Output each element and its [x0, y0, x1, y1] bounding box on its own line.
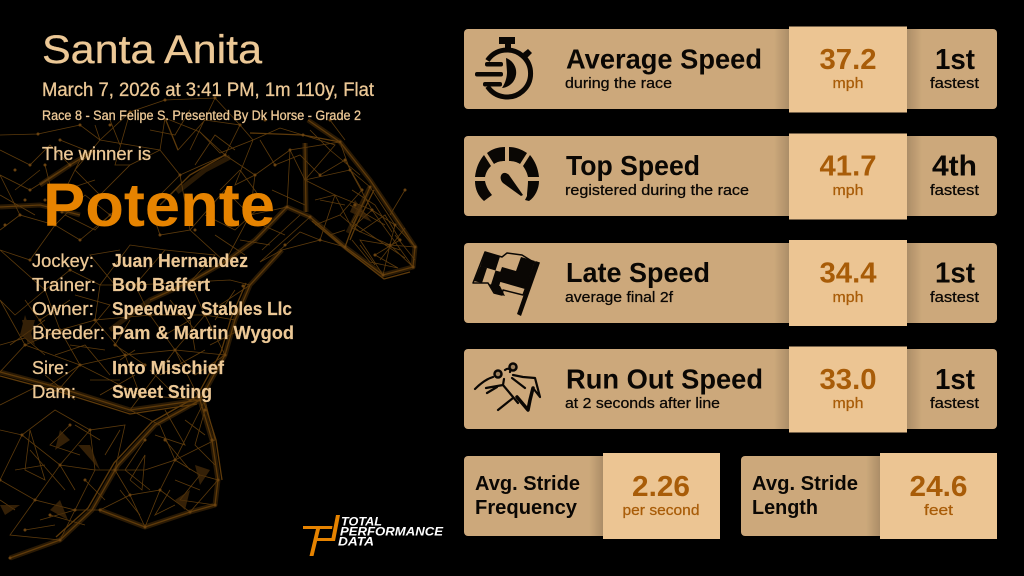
label: stride length: Avg. Stride [752, 472, 858, 495]
winner intro: The winner is [42, 144, 151, 164]
rank label: fastest [930, 396, 979, 412]
label: stride length: Length [752, 496, 818, 519]
value: 41.7 [820, 150, 876, 182]
connections details: Into Mischief [112, 357, 225, 378]
rank label: fastest [930, 290, 979, 306]
winner name: Potente [43, 171, 275, 239]
logo: total performance data: TOTAL [341, 514, 382, 528]
title: venue: Santa Anita [42, 28, 263, 72]
race name: Race 8 - San Felipe S. Presented By Dk Horse - Grade 2 [42, 108, 361, 123]
icon: checkered flag [473, 252, 540, 316]
rank: 4th [932, 150, 977, 182]
connections details: Jockey: [32, 250, 94, 271]
label: stride frequency: Frequency [475, 496, 578, 519]
unit: mph [832, 396, 864, 412]
connections details [32, 250, 294, 402]
connections details: Dam: [32, 381, 76, 402]
connections details: Trainer: [32, 274, 96, 295]
connections details: Sire: [32, 357, 69, 378]
logo: total performance data: PERFORMANCE [340, 524, 444, 538]
label: run out speed: Run Out Speed [566, 364, 763, 394]
panel: run out speed [464, 346, 997, 432]
panel: average stride length [741, 453, 997, 539]
unit: mph [832, 183, 864, 199]
value: 37.2 [820, 44, 876, 76]
connections details: Bob Baffert [112, 274, 210, 295]
panel: average stride frequency [464, 453, 720, 539]
unit: per second [622, 503, 700, 519]
rank: 1st [935, 258, 975, 290]
unit: feet [924, 503, 953, 519]
sublabel: average final 2f [565, 290, 674, 306]
icon: speedometer [475, 147, 539, 201]
panel: late speed [464, 240, 997, 326]
connections details: Pam & Martin Wygod [112, 322, 294, 343]
sublabel: at 2 seconds after line [565, 396, 720, 412]
panel: top speed [464, 134, 997, 220]
connections details: Sweet Sting [112, 381, 212, 402]
value: 34.4 [820, 258, 877, 290]
label: late speed: Late Speed [566, 257, 710, 288]
rank label: fastest [930, 76, 979, 92]
panel: average speed [464, 26, 997, 112]
sublabel: during the race [565, 76, 672, 92]
connections details: Owner: [32, 298, 94, 319]
value: 24.6 [910, 471, 968, 503]
label: average speed: Average Speed [566, 44, 762, 74]
value: 33.0 [820, 364, 876, 396]
rank: 1st [935, 364, 975, 396]
rank: 1st [935, 44, 975, 76]
connections details: Breeder: [32, 322, 105, 343]
connections details: Speedway Stables Llc [112, 298, 292, 319]
value: 2.26 [632, 471, 690, 503]
sublabel: registered during the race [565, 183, 749, 199]
label: stride frequency: Avg. Stride [475, 472, 580, 495]
label: top speed: Top Speed [566, 150, 700, 181]
icon: racing horses and jockeys [475, 364, 540, 410]
logo: total performance data [303, 514, 444, 556]
unit: mph [832, 76, 864, 92]
connections details: Juan Hernandez [112, 250, 248, 271]
logo: total performance data: DATA [338, 534, 374, 548]
horse wireframe network [0, 98, 415, 558]
rank label: fastest [930, 183, 979, 199]
icon: stopwatch [475, 37, 532, 97]
unit: mph [832, 290, 864, 306]
race date and distance: March 7, 2026 at 3:41 PM, 1m 110y, Flat [42, 80, 375, 101]
